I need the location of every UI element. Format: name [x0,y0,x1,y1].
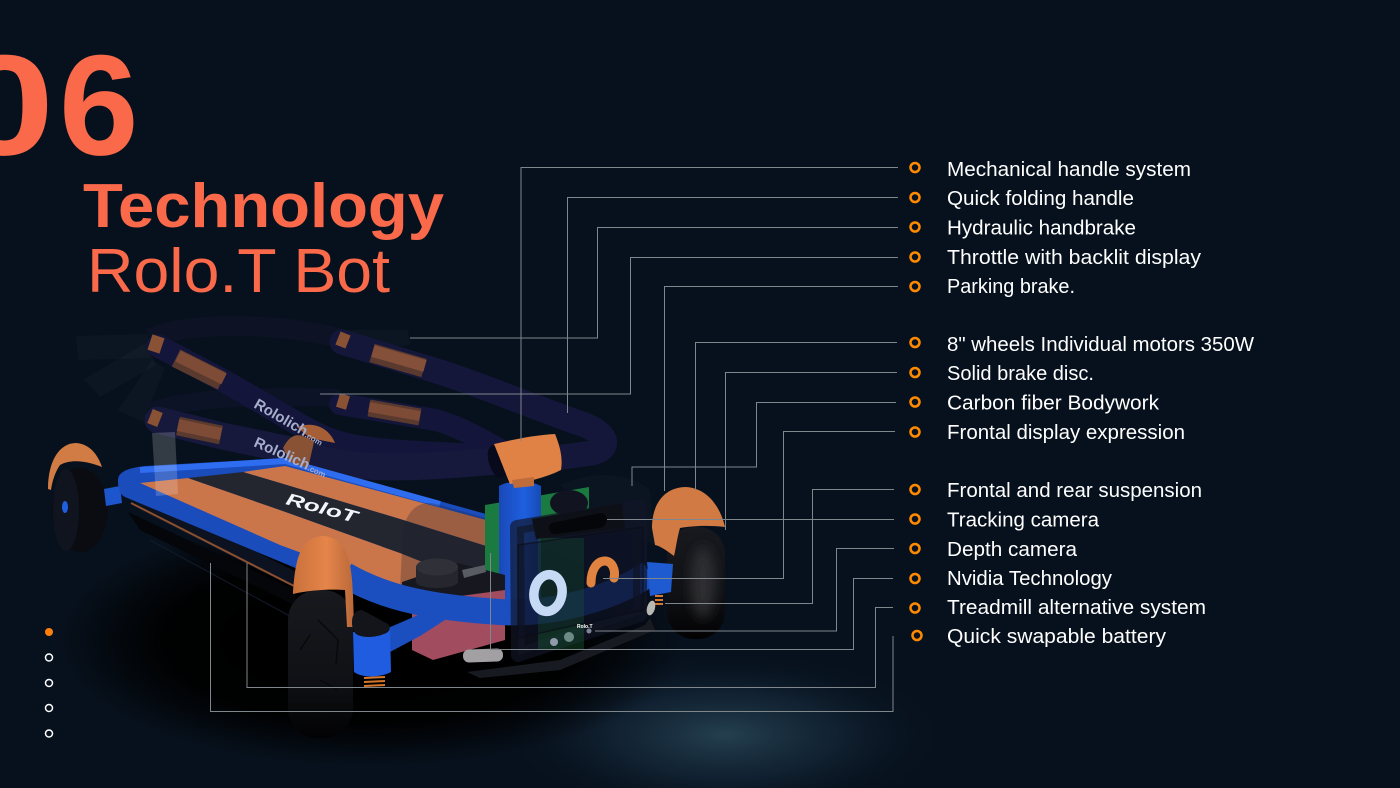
deck top [140,466,486,600]
fender [652,487,725,556]
sleeve neck [512,477,534,488]
rear tire [52,468,108,552]
handle end cap [484,443,510,481]
item: handbrake: Hydraulic handbrake [947,218,1136,240]
front left wheel [288,536,354,738]
right front wheel [652,487,725,639]
item: suspension: Frontal and rear suspension [947,480,1202,502]
face: orange arc [591,561,615,583]
ground shadow [55,512,685,768]
feature list: handle group [910,159,1201,298]
steering pole [499,482,541,605]
scooter illustration [48,326,725,738]
green board through display [538,538,584,650]
upper orange strip [243,466,486,546]
translucent rear shell [400,503,486,610]
brake disc oval [645,600,657,616]
black cap [352,610,390,637]
front left suspension [352,610,445,686]
chassis underside [467,618,655,678]
item: parking brake: Parking brake. [947,276,1075,298]
treadmill under deck [128,503,297,620]
rear arm [104,486,122,506]
control module [402,558,505,597]
front shell [560,475,655,545]
screen outline [518,527,643,638]
lower orange strip [140,478,430,600]
panel body [517,506,640,655]
item: tracking camera: Tracking camera [947,510,1100,532]
item: throttle: Throttle with backlit display [947,247,1201,269]
item: mechanical handle: Mechanical handle system [947,159,1191,181]
blue body [353,630,391,676]
floor glow [500,650,950,788]
item: display expression: Frontal display expression [947,422,1185,444]
ghost upper handle loop [150,326,340,338]
deck frame [118,458,486,597]
electronics board [485,487,589,600]
rear wheel [48,443,108,552]
brand text on handle: Rololich.com [251,396,327,449]
upper copper sections [150,338,425,417]
lower left handle tube [150,416,495,467]
battery swap handle [463,648,503,663]
face: eye [531,572,565,614]
depth camera lenses [550,624,593,646]
ghost lower handle loop [150,397,340,412]
orange handle sleeve [494,434,562,484]
blue front tube [345,573,650,612]
deck frame highlight [140,461,440,504]
section number: 6 [59,26,139,186]
handle orange grips [297,425,335,443]
section number [0,26,139,186]
item: wheels: 8" wheels Individual motors 350W [947,334,1254,356]
feature list: systems group [910,480,1206,648]
item: brake disc: Solid brake disc. [947,363,1094,385]
tracking camera [532,503,625,539]
depth camera lenses: Rolo.T [577,624,593,630]
rear fender [48,443,102,490]
item: treadmill: Treadmill alternative system [947,597,1206,619]
item: battery: Quick swapable battery [947,626,1166,648]
battery [412,585,505,660]
display panel [517,506,643,655]
leader lines [210,168,898,712]
item: quick folding: Quick folding handle [947,188,1134,210]
item: bodywork: Carbon fiber Bodywork [947,392,1160,414]
handle lower grip [283,435,314,468]
ghost folding handle positions [76,330,410,422]
brand text on lower handle: Rololich.com [251,434,329,481]
sensor knob [550,490,588,516]
page pagination dots [45,628,53,737]
tire [288,590,353,738]
item: nvidia: Nvidia Technology [947,568,1112,590]
item: depth camera: Depth camera [947,539,1078,561]
upper handle tubes [158,342,605,460]
arm [388,612,445,652]
fender [293,536,354,627]
title: Technology: Technology [83,172,445,241]
deck logo: RoloT [284,490,362,527]
black strip [188,472,486,590]
ghost brake block [152,432,178,496]
spring [364,677,385,686]
rear hub [53,469,79,551]
tire [667,527,725,639]
feature list: drive group [910,334,1254,444]
right suspension [647,562,673,604]
subtitle: Rolo.T Bot: Rolo.T Bot [87,237,390,306]
